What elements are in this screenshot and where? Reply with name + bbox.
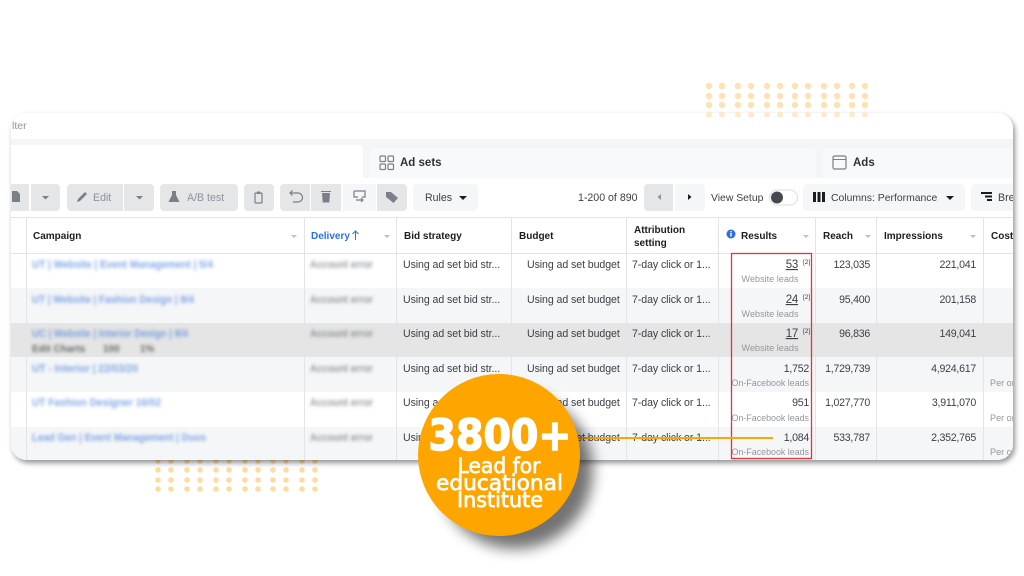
column: campaign names (blurred): 100 bbox=[103, 344, 120, 355]
dot pattern: top right bbox=[706, 83, 868, 108]
column: bid strategy: Using ad set bid str... bbox=[403, 328, 500, 340]
column: impressions: 3,911,070 bbox=[932, 397, 976, 409]
button: A/B test: A/B test bbox=[187, 192, 224, 204]
column: reach: 95,400 bbox=[839, 294, 870, 306]
column: impressions: 2,352,765 bbox=[931, 432, 976, 444]
table row backgrounds bbox=[11, 288, 1013, 460]
column: budget: Using ad set budget bbox=[527, 397, 620, 409]
button: undo bbox=[280, 184, 310, 211]
column: results: 24 bbox=[786, 294, 799, 306]
column: campaign names (blurred): UT Fashion Designer 16/02 bbox=[32, 397, 161, 409]
column: delivery status (blurred): Account error bbox=[310, 397, 373, 409]
table header: Delivery bbox=[311, 231, 350, 242]
column: attribution setting: 7-day click or 1... bbox=[632, 259, 711, 271]
button: rules: Rules bbox=[425, 192, 452, 204]
column: campaign names (blurred): Edit Charts bbox=[32, 344, 86, 355]
column: campaign names (blurred): UT - Interior | 22/03/20 bbox=[32, 363, 138, 375]
table header: Impressions bbox=[884, 231, 943, 242]
button: edit menu bbox=[124, 184, 154, 211]
badge caption bbox=[436, 454, 563, 512]
column: results: [2] bbox=[803, 294, 810, 301]
button: delete bbox=[311, 184, 341, 211]
column: budget: Using ad set budget bbox=[527, 328, 620, 340]
column: cost per result bbox=[990, 380, 1013, 455]
column: results bbox=[732, 259, 810, 457]
column: campaign names (blurred): 1% bbox=[140, 344, 155, 355]
column: campaign names (blurred): Lead Gen | Event Management | Duos bbox=[32, 432, 206, 444]
column: results: 951 bbox=[792, 397, 809, 409]
toolbar bbox=[11, 184, 1024, 211]
column: budget: Using ad set budget bbox=[527, 259, 620, 271]
column: attribution setting: 7-day click or 1... bbox=[632, 363, 711, 375]
column: results: On-Facebook leads bbox=[732, 378, 810, 388]
column: results: 1,752 bbox=[784, 363, 809, 375]
column: cost per result: Per on bbox=[990, 413, 1017, 423]
dot pattern: bottom left bbox=[155, 458, 318, 492]
button: breakdown: Bre bbox=[998, 192, 1015, 204]
column: attribution setting: 7-day click or 1... bbox=[632, 397, 711, 409]
table header: Reach bbox=[823, 231, 853, 242]
column: delivery status (blurred): Account error bbox=[310, 432, 373, 444]
button: columns bbox=[803, 184, 965, 211]
column: campaign names (blurred): UC | Website | Interior Design | 8/4 bbox=[32, 328, 188, 340]
column: reach: 1,027,770 bbox=[825, 397, 870, 409]
column: results: Website leads bbox=[742, 274, 799, 284]
column: attribution setting: 7-day click or 1... bbox=[632, 432, 711, 444]
column: budget: Using ad set budget bbox=[527, 432, 620, 444]
button: tag bbox=[377, 184, 407, 211]
column: reach: 96,836 bbox=[839, 328, 870, 340]
column: campaign names (blurred): UT | Website | Event Management | 5/4 bbox=[32, 259, 213, 271]
badge caption: Lead for bbox=[458, 454, 541, 478]
column: cost per result: Per on bbox=[990, 378, 1017, 388]
table header bbox=[33, 226, 1013, 248]
results highlight box bbox=[732, 254, 812, 458]
column: impressions: 4,924,617 bbox=[931, 363, 976, 375]
button: rules bbox=[413, 184, 478, 211]
column: bid strategy: Using ad set bid str... bbox=[403, 259, 500, 271]
button: move bbox=[343, 184, 376, 211]
column: delivery status (blurred): Account error bbox=[310, 294, 373, 306]
column: cost per result: Per on bbox=[990, 447, 1017, 457]
table header: Results bbox=[741, 231, 778, 242]
button: A/B test bbox=[160, 184, 238, 211]
column: results: Website leads bbox=[742, 309, 799, 319]
column: attribution setting bbox=[632, 259, 711, 444]
column: delivery status (blurred): Account error bbox=[310, 363, 373, 375]
column: delivery status (blurred): Account error bbox=[310, 328, 373, 340]
tab: ads: Ads bbox=[853, 157, 875, 169]
badge caption: educational bbox=[436, 471, 563, 495]
badge caption: Institute bbox=[457, 488, 543, 512]
callout connector line bbox=[560, 437, 773, 439]
table header: Bid strategy bbox=[404, 231, 462, 242]
button: clipboard bbox=[244, 184, 274, 211]
badge number: 3800+ bbox=[428, 411, 572, 461]
tab: ad sets bbox=[379, 155, 441, 170]
column: budget: Using ad set budget bbox=[527, 363, 620, 375]
pagination: 1-200 of 890 bbox=[578, 192, 638, 204]
table header: Budget bbox=[519, 231, 554, 242]
callout: 3800+ lead badge bbox=[418, 374, 593, 549]
column: bid strategy: Using ad set bid str... bbox=[403, 432, 500, 444]
button: duplicate menu bbox=[31, 184, 60, 211]
column: results: 53 bbox=[786, 259, 798, 271]
pagination bbox=[578, 184, 705, 211]
tab: ads bbox=[832, 155, 874, 170]
column: campaign names (blurred) bbox=[32, 259, 213, 444]
column: campaign names (blurred): UT | Website | Fashion Design | 8/4 bbox=[32, 294, 194, 306]
column: reach: 533,787 bbox=[833, 432, 870, 444]
button: edit bbox=[67, 184, 123, 211]
column: budget bbox=[527, 259, 620, 444]
button: breakdown bbox=[971, 184, 1013, 211]
column: attribution setting: 7-day click or 1... bbox=[632, 328, 711, 340]
column: delivery status (blurred): Account error bbox=[310, 259, 373, 271]
column: results: [2] bbox=[803, 259, 810, 266]
column: attribution setting: 7-day click or 1... bbox=[632, 294, 711, 306]
column: results: On-Facebook leads bbox=[732, 447, 810, 457]
column: reach: 1,729,739 bbox=[825, 363, 870, 375]
column: delivery status (blurred) bbox=[310, 259, 373, 444]
tab: ad sets: Ad sets bbox=[400, 157, 442, 169]
column: reach bbox=[825, 259, 870, 444]
table header: Campaign bbox=[33, 231, 81, 242]
tab bar bbox=[11, 139, 1013, 178]
column: results: [2] bbox=[803, 328, 810, 335]
column: impressions: 221,041 bbox=[939, 259, 976, 271]
tab: campaigns bbox=[11, 145, 363, 178]
column: reach: 123,035 bbox=[833, 259, 870, 271]
button: duplicate bbox=[11, 184, 29, 211]
table header: Cost bbox=[991, 231, 1014, 242]
column: budget: Using ad set budget bbox=[527, 294, 620, 306]
column: impressions: 201,158 bbox=[939, 294, 976, 306]
column: results: 17 bbox=[786, 328, 798, 340]
column: impressions: 149,041 bbox=[939, 328, 976, 340]
column: bid strategy bbox=[403, 259, 500, 444]
column: bid strategy: Using ad set bid str... bbox=[403, 294, 500, 306]
column: results: Website leads bbox=[742, 343, 799, 353]
column: results: 1,084 bbox=[784, 432, 809, 444]
filter bar label: lter bbox=[12, 120, 27, 132]
view setup toggle bbox=[711, 190, 798, 205]
button: columns: Columns: Performance bbox=[831, 193, 937, 204]
column: results: On-Facebook leads bbox=[732, 413, 810, 423]
table header: setting bbox=[634, 238, 667, 249]
column: bid strategy: Using ad set bid str... bbox=[403, 397, 500, 409]
column: bid strategy: Using ad set bid str... bbox=[403, 363, 500, 375]
column: impressions bbox=[931, 259, 976, 444]
button: edit: Edit bbox=[93, 192, 111, 204]
view setup toggle: View Setup bbox=[711, 193, 764, 204]
panel: ads manager screenshot card bbox=[11, 113, 1024, 460]
dot pattern: faded row over card edge bbox=[706, 112, 868, 118]
table header: Attribution bbox=[634, 225, 685, 236]
